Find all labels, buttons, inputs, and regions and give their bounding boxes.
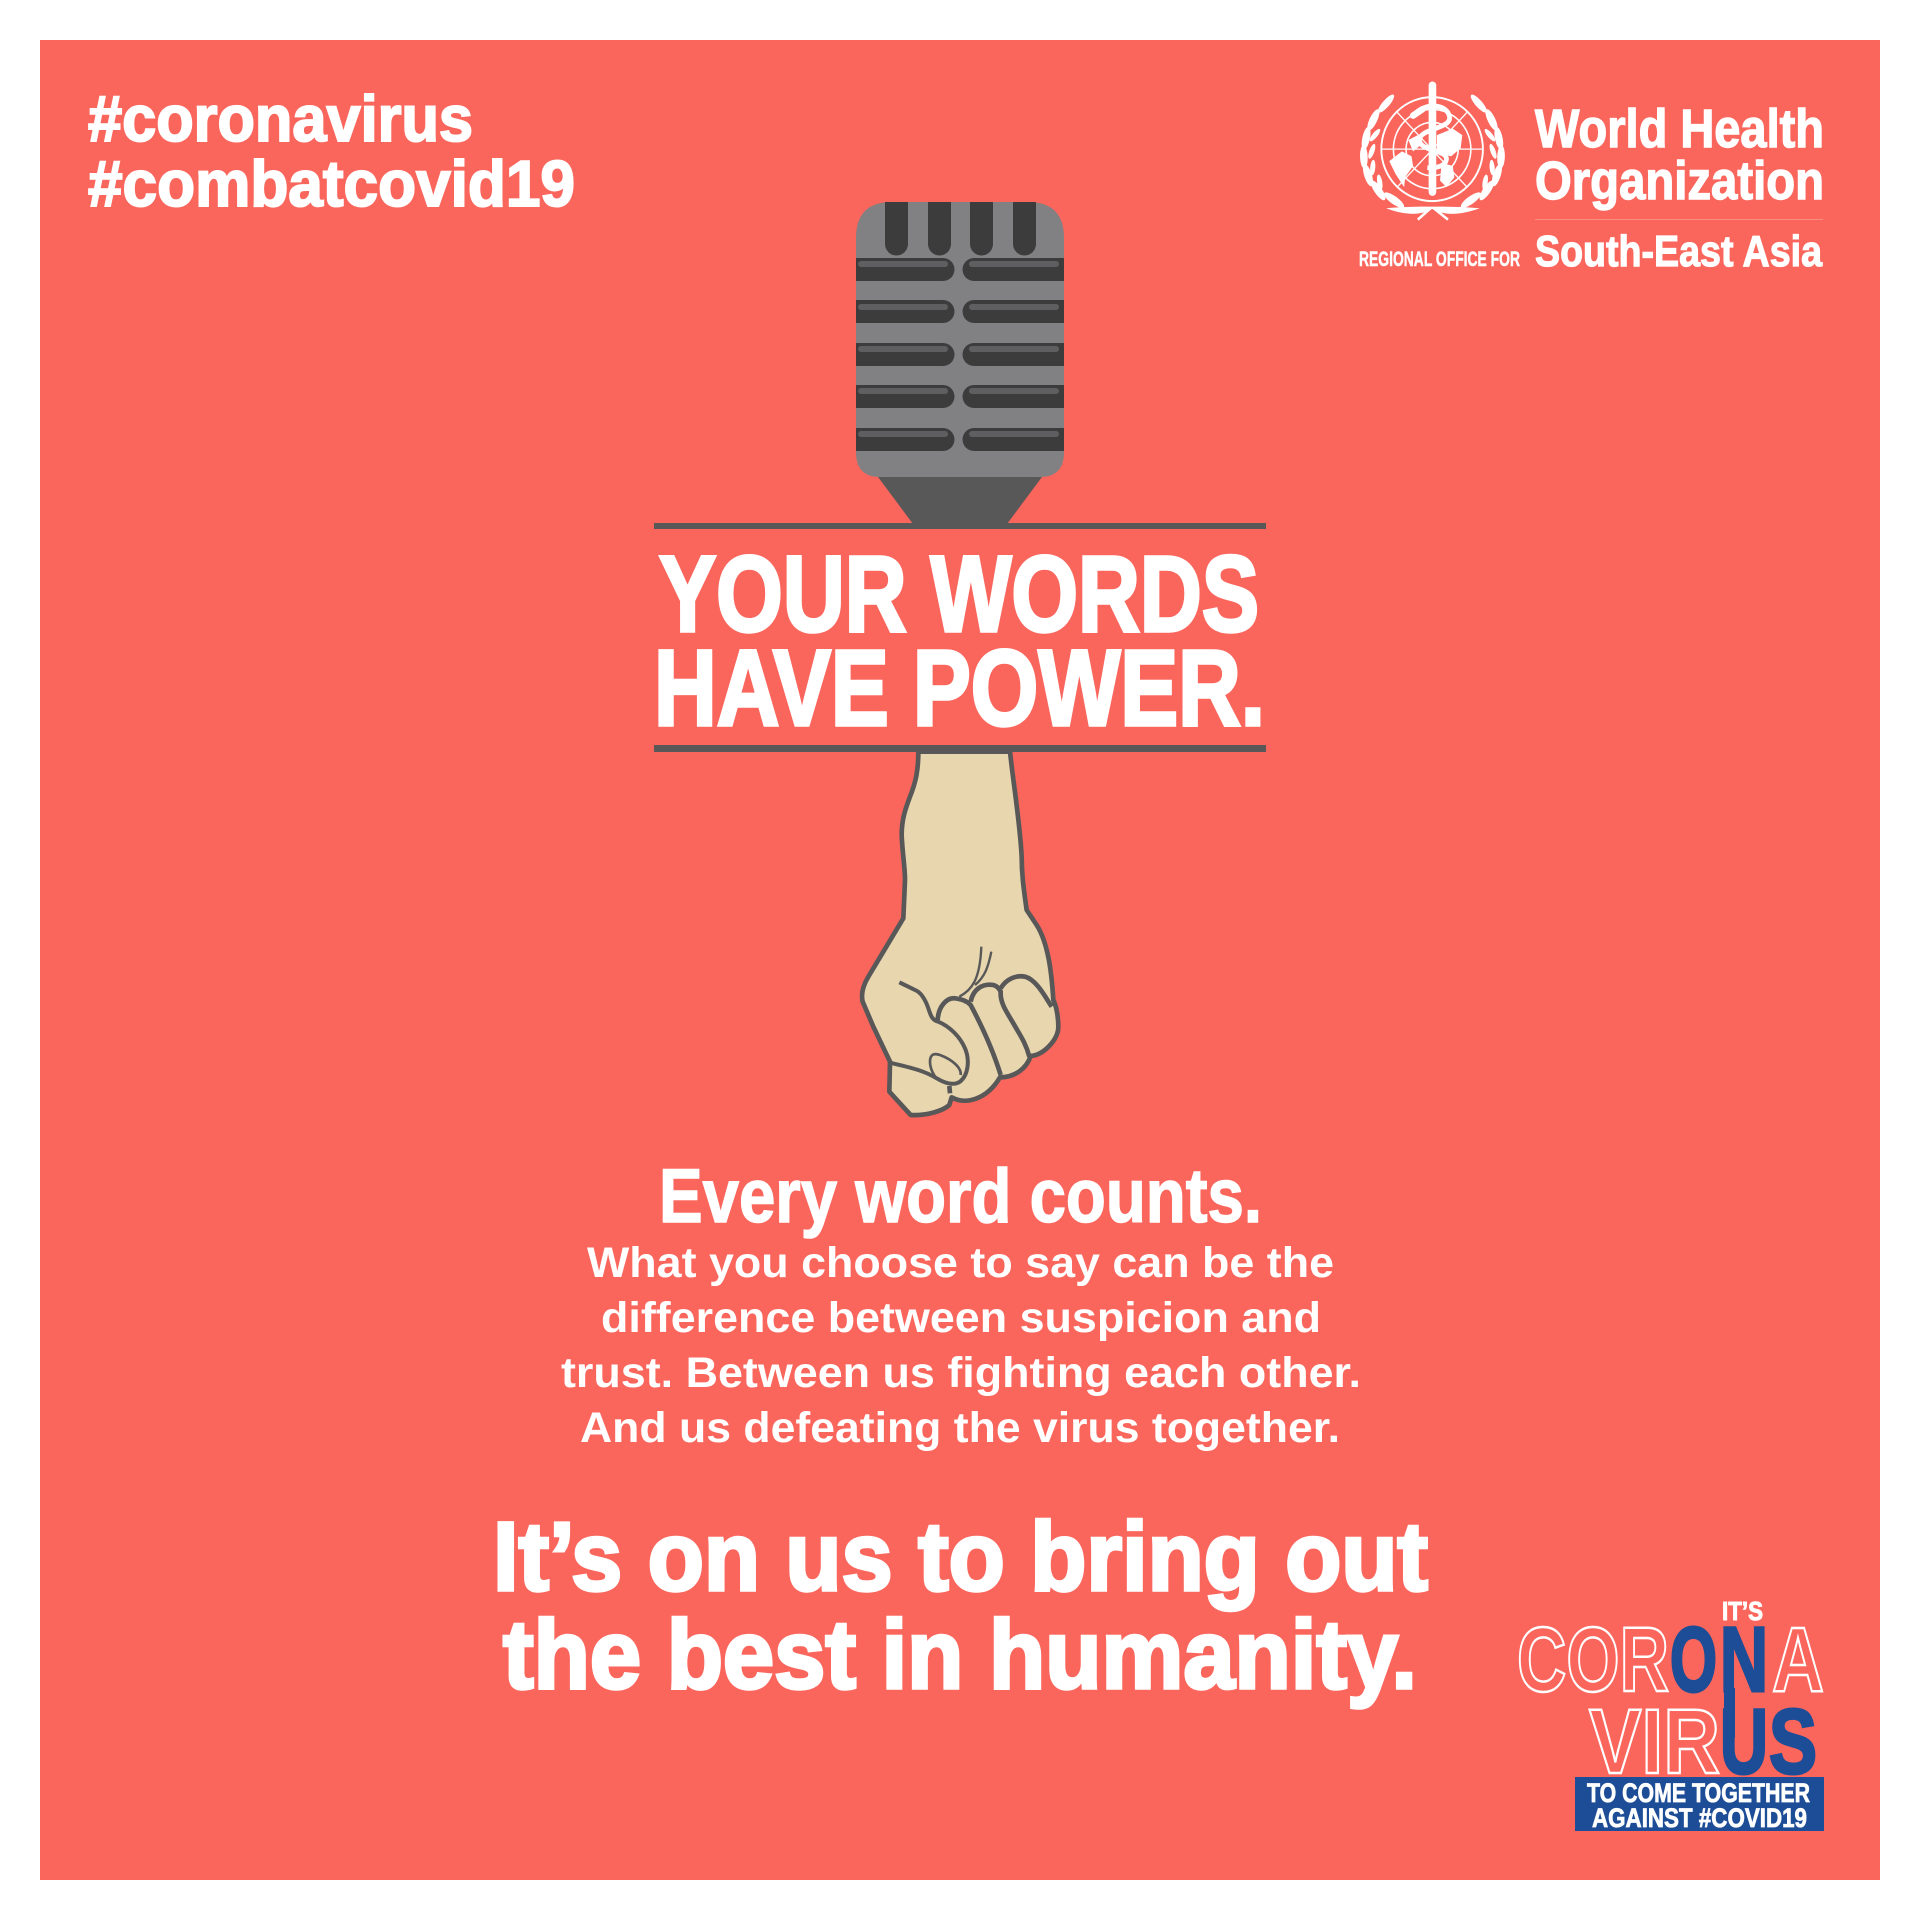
icon: raised fist [862, 752, 1058, 1115]
WHO name: Organization [1535, 151, 1824, 211]
regional office: REGIONAL OFFICE FOR [1359, 248, 1520, 271]
bottom rule [654, 745, 1266, 752]
body text: trust. Between us fighting each other. [561, 1349, 1361, 1397]
it's: IT’S [1722, 1596, 1763, 1626]
blue letters: O [1670, 1609, 1717, 1711]
campaign logo: It's on us [1517, 1596, 1824, 1833]
blue letters: N [1720, 1609, 1768, 1711]
headline: YOUR WORDS [659, 533, 1259, 654]
banner [1575, 1777, 1824, 1833]
closing statement [493, 1502, 1428, 1709]
sub-heading: Every word counts. [659, 1154, 1262, 1239]
body text: difference between suspicion and [601, 1294, 1321, 1342]
regional office [1359, 227, 1822, 276]
outlined letters: COR [1517, 1609, 1669, 1711]
hashtags: #coronavirus [88, 82, 473, 155]
hashtags [88, 82, 575, 220]
closing statement: the best in humanity. [503, 1600, 1417, 1709]
blue letters: S [1769, 1691, 1817, 1793]
icon: microphone head [856, 202, 1064, 524]
WHO name [1535, 99, 1824, 211]
hashtags: #combatcovid19 [88, 147, 575, 220]
WHO name: World Health [1535, 99, 1824, 159]
icon: WHO emblem [1360, 82, 1505, 220]
banner: AGAINST #COVID19 [1592, 1803, 1807, 1833]
regional office: South-East Asia [1535, 227, 1822, 276]
blue letters [1670, 1609, 1817, 1793]
icon: laurel wreath left [1360, 93, 1406, 210]
headline: HAVE POWER. [654, 627, 1265, 748]
top rule [654, 523, 1266, 529]
outlined letters: VIR [1589, 1691, 1720, 1793]
blue letters: U [1720, 1691, 1768, 1793]
WHO logo [1359, 82, 1824, 276]
closing statement: It’s on us to bring out [493, 1502, 1428, 1611]
body text: And us defeating the virus together. [580, 1404, 1340, 1452]
body text: What you choose to say can be the [587, 1239, 1334, 1287]
banner: TO COME TOGETHER [1587, 1778, 1810, 1808]
outlined letters: A [1772, 1609, 1824, 1711]
body text [561, 1239, 1361, 1452]
outlined letters [1517, 1609, 1824, 1793]
headline [654, 533, 1265, 748]
